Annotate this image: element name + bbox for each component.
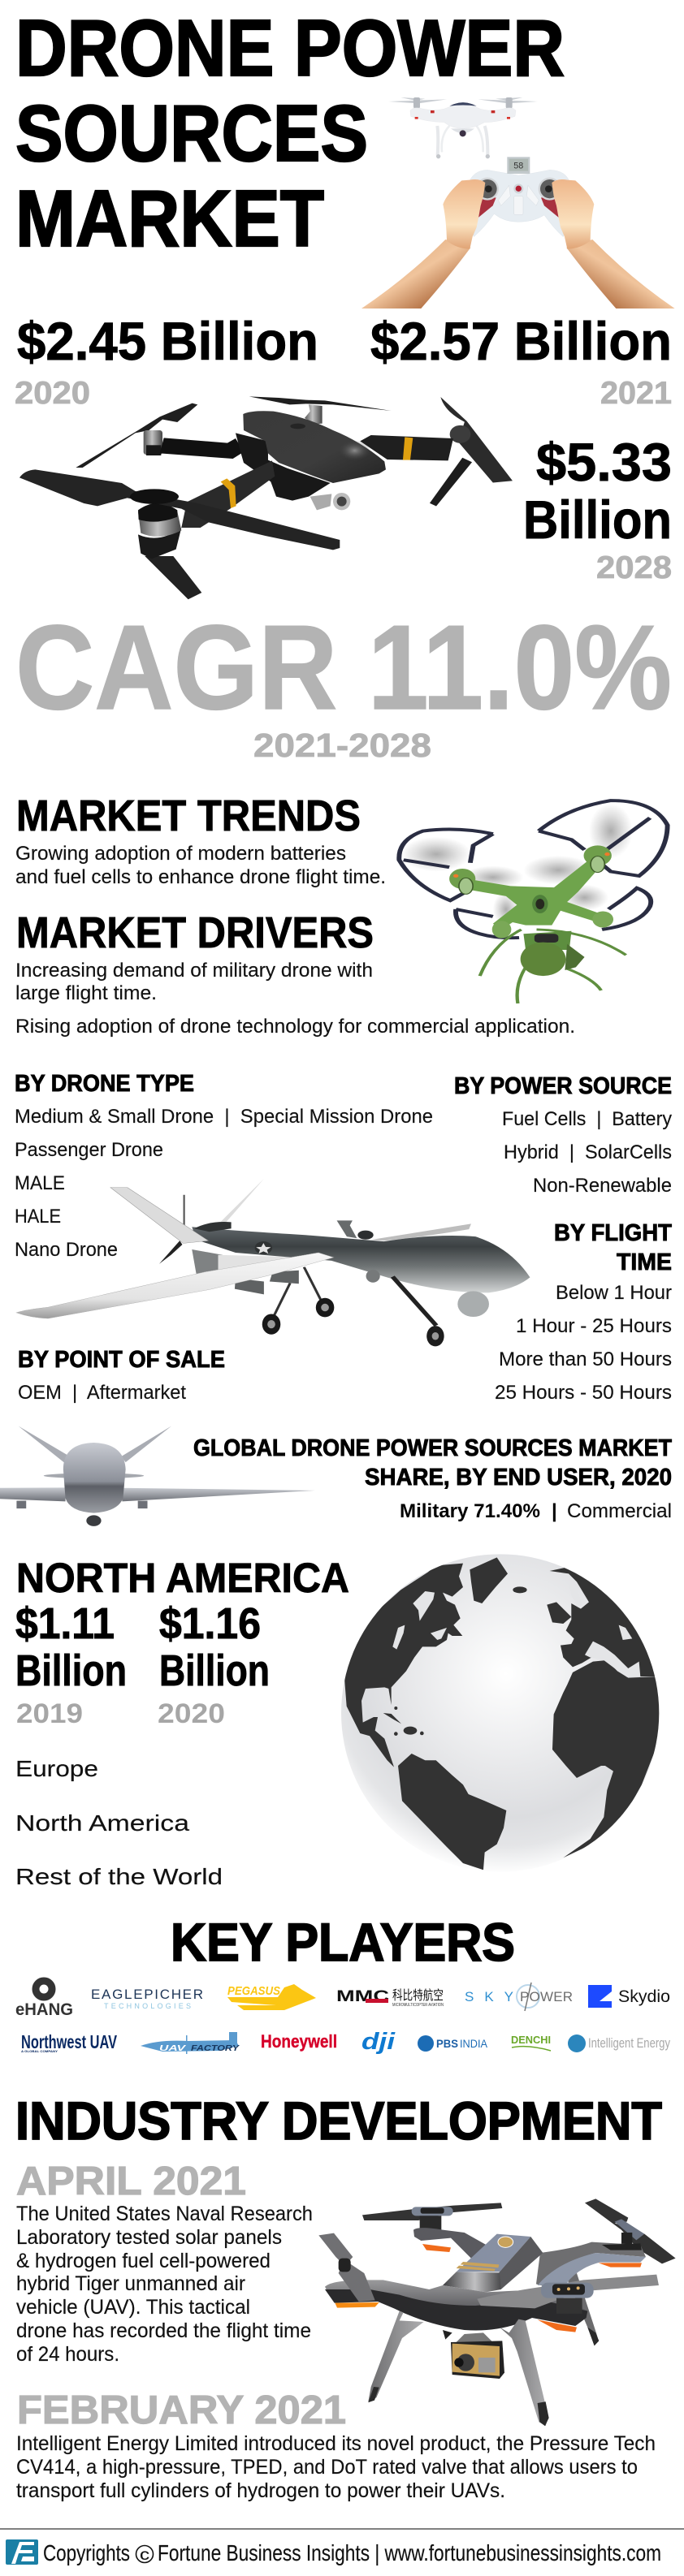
region list: Rest of the World [15,1864,223,1889]
panel: market share by end user [193,1435,672,1522]
logo: pbs india [418,2035,488,2052]
logo: eaglepicher [91,1987,203,2010]
icon: predator military drone [16,1179,530,1346]
stat 2028 [523,432,672,585]
logo: ehang [15,1981,73,2019]
text block: and fuel cells to enhance drone flight time. [15,866,386,888]
title [15,3,565,263]
stat 2020: $2.45 Billion [17,311,318,371]
logo: uav factory [141,2032,240,2054]
heading [193,1435,672,1491]
logo: honeywell: Honeywell [261,2031,337,2052]
list: Medium & Small Drone | Special Mission Drone [15,1106,433,1128]
title: DRONE POWER [15,3,565,93]
region list: Europe [15,1756,98,1781]
panel: february 2021 development [16,2388,656,2502]
heading: BY POWER SOURCE [454,1073,672,1099]
right arm [566,239,675,309]
controller body [467,170,571,237]
share values [400,1500,672,1522]
logo: dji: dji [361,2029,396,2055]
region list [15,1756,223,1889]
logo: pbs india: INDIA [460,2037,488,2050]
stat 2020: Billion [159,1646,270,1695]
cagr figure [15,601,672,764]
list: More than 50 Hours [499,1348,672,1370]
list [15,1106,433,1261]
icon: globe [341,1554,660,1872]
list: MALE [15,1172,65,1194]
heading: TIME [617,1249,672,1275]
stat 2020: 2020 [15,376,90,411]
logo: northwest uav [21,2031,117,2053]
text block: large flight time. [15,982,157,1004]
logo: intelligent energy [568,2034,670,2052]
list: Fuel Cells | Battery [502,1108,672,1130]
heading: key players: KEY PLAYERS [171,1912,515,1972]
controller screen: 58 [513,161,523,170]
panel: april 2021 development [16,2160,313,2366]
stat 2019: Billion [15,1646,127,1695]
share values: | [552,1500,557,1522]
icon: drone front view [0,1426,315,1526]
logo: denchi: DENCHI [511,2034,551,2046]
heading: BY FLIGHT [554,1220,672,1246]
right hand [552,179,594,249]
list: 1 Hour - 25 Hours [516,1315,672,1337]
heading: BY POINT OF SALE [18,1347,225,1373]
logo: uav factory: UAV [159,2044,187,2053]
text block: Increasing demand of military drone with [15,960,373,982]
panel: by flight time [495,1220,672,1404]
copyright text: Copyrights [43,2540,130,2565]
stat 2028: 2028 [596,550,672,585]
logo: eaglepicher: TECHNOLOGIES [104,2002,191,2010]
list: OEM | Aftermarket [18,1382,186,1404]
text block: Growing adoption of modern batteries [15,843,346,865]
paragraph: hybrid Tiger unmanned air [16,2272,245,2295]
heading: NORTH AMERICA [16,1555,349,1601]
heading: SHARE, BY END USER, 2020 [365,1465,672,1491]
logo: northwest uav: Northwest UAV [21,2031,117,2052]
stat 2019: $1.11 [15,1599,115,1648]
stat 2019 [15,1599,127,1729]
list [502,1108,672,1197]
logo: skydio [588,1985,670,2008]
stat 2021: $2.57 Billion [370,311,672,371]
stat 2028: $5.33 [536,432,672,492]
paragraph: Laboratory tested solar panels [16,2226,282,2249]
list: Nano Drone [15,1239,118,1261]
logo: pegasus [227,1984,316,2010]
logo: skypower: SKY [465,1989,513,2004]
paragraph: & hydrogen fuel cell-powered [16,2250,271,2272]
heading: MARKET DRIVERS [16,908,374,957]
paragraph [16,2432,656,2502]
share values: Commercial [567,1500,672,1522]
icon: fortune business insights logo [6,2539,38,2565]
list: Passenger Drone [15,1139,163,1161]
title: SOURCES [15,88,368,178]
logo: pegasus: PEGASUS [227,1984,280,1998]
heading: BY DRONE TYPE [15,1071,194,1097]
logo: skypower: POWER [520,1989,573,2004]
footer [6,2539,661,2565]
list: 25 Hours - 50 Hours [495,1382,672,1404]
panel: by power source [454,1073,672,1197]
logo: mmc: MICROMULTICOPTER AVIATION [392,2003,444,2008]
paragraph: transport full cylinders of hydrogen to power their UAVs. [16,2479,505,2502]
date heading: APRIL 2021 [16,2160,246,2203]
logo: uav factory: FACTORY [191,2044,240,2053]
panel: market trends [15,792,386,888]
paragraph: of 24 hours. [16,2343,119,2366]
icon: hands holding controller [361,157,675,309]
controller screen [507,157,530,174]
list: HALE [15,1206,61,1228]
market size stats [15,311,672,585]
paragraph: vehicle (UAV). This tactical [16,2296,250,2319]
paragraph: drone has recorded the flight time [16,2319,311,2342]
stat 2021 [370,311,672,411]
paragraph: CV414, a high-pressure, TPED, and DoT rated valve that allows users to [16,2456,638,2479]
logo: skypower [465,1983,573,2011]
logo: mmc: 科比特航空 [392,1988,444,2003]
stat 2020 [158,1599,270,1729]
cagr period: 2021-2028 [253,727,431,764]
text block [15,960,575,1038]
icon: green military quadcopter [399,800,668,1003]
logo: mmc [336,1988,444,2008]
panel: market drivers [15,908,575,1038]
copyright text: c [140,2547,149,2564]
paragraph: The United States Naval Research [16,2203,313,2225]
stat 2028: Billion [523,490,672,550]
icon: camera drone [318,2198,676,2426]
panel: regional [15,1555,349,1889]
left hand [443,179,485,249]
share values: Military 71.40% [400,1500,540,1522]
title: MARKET [15,174,324,263]
panel: company logos [15,1981,670,2055]
left arm [361,239,470,309]
paragraph: Intelligent Energy Limited introduced its novel product, the Pressure Tech [16,2432,656,2455]
logo: skydio: Skydio [618,1987,670,2006]
list: Non-Renewable [533,1175,672,1197]
stat 2020: $1.16 [159,1599,261,1648]
text block: Rising adoption of drone technology for commercial application. [15,1016,575,1038]
list [495,1282,672,1404]
stat 2020 [15,311,318,411]
panel: by drone type [15,1071,433,1261]
list: Hybrid | SolarCells [504,1141,672,1163]
heading: MARKET TRENDS [16,792,361,840]
paragraph [16,2203,313,2366]
stat 2021: 2021 [600,376,672,411]
list: Below 1 Hour [556,1282,672,1304]
region list: North America [15,1810,189,1836]
logo: ehang: eHANG [15,2000,73,2019]
text block [15,843,386,888]
logo: eaglepicher: EAGLEPICHER [91,1987,203,2002]
logo: northwest uav: A GLOBAL COMPANY [21,2049,58,2053]
icon: white quadcopter [388,97,538,158]
logo: mmc: MMC [336,1988,389,2005]
logo: pbs india: PBS [436,2037,458,2050]
heading [554,1220,672,1275]
panel: by point of sale [18,1347,225,1404]
stat 2019: 2019 [16,1698,83,1729]
icon: black foldable drone [19,396,513,599]
stat 2020: 2020 [158,1698,225,1729]
date heading: FEBRUARY 2021 [17,2388,346,2432]
